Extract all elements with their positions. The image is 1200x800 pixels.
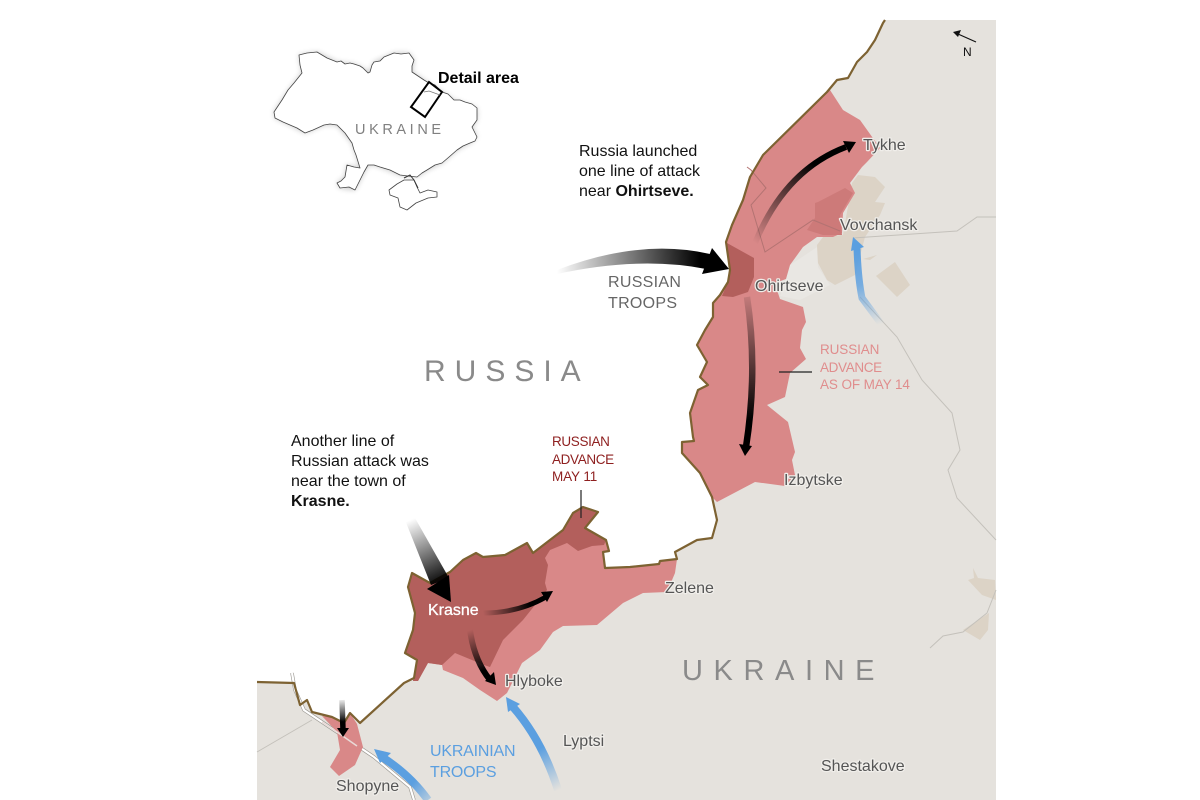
label: Russian advance as of May 14: AS OF MAY 14 <box>820 377 910 392</box>
arrow: toward Tykhe <box>755 141 856 243</box>
annotation: Krasne attack: Krasne. <box>291 493 350 510</box>
arrow: Ukrainian troops to Shopyne area <box>374 749 428 800</box>
north arrow: N <box>963 45 972 59</box>
inset shadow <box>274 52 477 190</box>
area: Russian advance as of May 14 (north) <box>682 90 880 502</box>
town labels: Hlyboke <box>505 673 563 690</box>
light patch beside Ohirtseve <box>780 247 830 300</box>
leader line: advance May 11 <box>580 490 582 518</box>
annotation: Krasne attack: near the town of <box>291 473 406 490</box>
roads <box>257 217 996 752</box>
label: Russian advance May 11: RUSSIAN <box>552 434 610 449</box>
label: Russian advance May 11: ADVANCE <box>552 452 614 467</box>
inset isthmus detail <box>404 175 418 188</box>
annotation: Krasne attack: Russian attack was <box>291 453 429 470</box>
town labels: Lyptsi <box>563 733 604 750</box>
arrow: Krasne east <box>483 591 553 613</box>
inset label: Ukraine: UKRAINE <box>355 122 445 138</box>
annotation: Ohirtseve attack: Russia launched <box>579 143 697 160</box>
area: Russian advance May 11 near Ohirtseve <box>722 243 754 297</box>
thin border inside advance <box>747 167 840 252</box>
label: Russian advance as of May 14: ADVANCE <box>820 360 882 375</box>
town labels: Ohirtseve <box>755 278 824 295</box>
label: Ukrainian troops: TROOPS <box>430 764 496 781</box>
label: Russian troops: RUSSIAN <box>608 274 681 291</box>
label: Russian advance as of May 14: RUSSIAN <box>820 342 879 357</box>
arrow: toward Izbytske <box>739 297 752 456</box>
town labels: Shopyne <box>336 778 399 795</box>
country label: Russia: RUSSIA <box>424 355 590 388</box>
town labels: Krasne <box>428 602 479 619</box>
arrow: into Krasne <box>405 518 451 602</box>
international border <box>257 20 885 723</box>
arrow: Russian troops to Ohirtseve <box>557 248 729 274</box>
arrow: Ukrainian troops to Hlyboke <box>506 697 558 790</box>
country label: Ukraine: UKRAINE <box>682 655 885 687</box>
arrow: Krasne to Hlyboke <box>470 630 496 685</box>
north arrow <box>953 30 976 59</box>
land: Ukraine base map <box>257 20 996 800</box>
town labels: Zelene <box>665 580 714 597</box>
arrow: toward Shopyne <box>337 700 349 737</box>
label: Russian troops: TROOPS <box>608 295 677 312</box>
town labels: Tykhe <box>863 137 906 154</box>
inset label: Detail area: Detail area <box>438 70 519 87</box>
inset detail box <box>411 82 442 117</box>
annotation: Ohirtseve attack: one line of attack <box>579 163 701 180</box>
town labels: Vovchansk <box>840 217 918 234</box>
label: Russian advance May 11: MAY 11 <box>552 469 597 484</box>
inset Crimea <box>389 180 437 210</box>
inset border trace <box>424 91 440 95</box>
arrow: Ukrainian troops to Vovchansk <box>851 237 882 325</box>
area: Russian advance near Shopyne <box>322 713 363 776</box>
leader line: advance as of May 14 <box>779 371 812 373</box>
town labels: Shestakove <box>821 758 905 775</box>
annotation: Krasne attack: Another line of <box>291 433 394 450</box>
towns: built-up areas <box>817 175 996 640</box>
inset map: Ukraine <box>274 52 519 210</box>
area: Russian advance May 11 near Krasne <box>405 507 606 681</box>
inset outline <box>274 52 477 190</box>
label: Ukrainian troops: UKRAINIAN <box>430 743 515 760</box>
white border road <box>292 673 414 800</box>
annotation: Ohirtseve attack: near Ohirtseve. <box>579 183 694 200</box>
area: Russian advance as of May 14 (south) <box>405 507 677 701</box>
road over Shopyne area <box>322 722 357 746</box>
town labels: Izbytske <box>784 472 843 489</box>
area: darker advance near Vovchansk <box>807 188 853 235</box>
town labels <box>336 137 918 795</box>
